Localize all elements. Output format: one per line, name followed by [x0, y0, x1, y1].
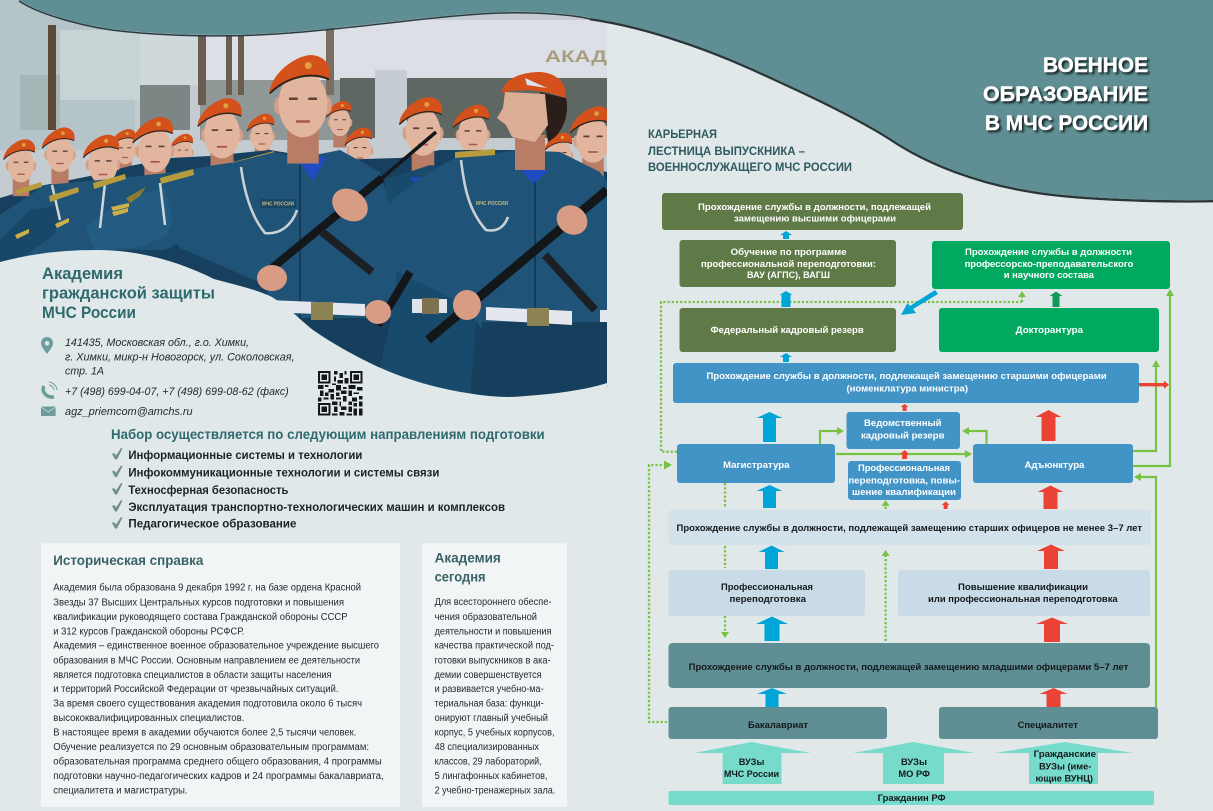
- box: professional retraining: переподготовка, повы-: [848, 475, 960, 486]
- box: senior officers 3-7 years: Прохождение службы в должности, подлежащей замещению старших офицеров не менее 3–7 лет: [676, 523, 1142, 534]
- box: bachelor's: [668, 707, 887, 739]
- panel text: Звезды 37 Высших Центральных курсов подготовки и повышения: [53, 597, 344, 608]
- panel text: В настоящее время в академии обучаются более 2,5 тысячи человек.: [53, 727, 356, 738]
- panel text: специалитета и магистратуры.: [53, 785, 187, 796]
- contact: email: agz_priemcom@amchs.ru: [65, 406, 193, 418]
- box: departmental reserve: Ведомственный: [864, 418, 942, 429]
- contact: phone: [43, 382, 289, 398]
- box: federal reserve: [680, 308, 896, 352]
- arrow: EMERCOM universities: МЧС России: [724, 769, 779, 780]
- box: retraining programme: [680, 240, 896, 287]
- box: retraining programme: Обучение по программе: [731, 247, 847, 258]
- icon: map pin: [41, 337, 53, 354]
- arrow: civil universities: ющие ВУНЦ): [1036, 773, 1093, 784]
- box: retraining programme: профессиональной переподготовки:: [701, 259, 876, 270]
- panel text: образования в МЧС России. Основным направлением ее деятельности: [53, 655, 360, 666]
- arrow: civil universities: [994, 742, 1133, 784]
- panel text: качества практической под-: [435, 641, 554, 652]
- box: doctoral studies: Докторантура: [1016, 325, 1084, 336]
- building background: [0, 0, 607, 200]
- panel: historical background: [41, 543, 400, 807]
- building background: АКАД: [545, 47, 607, 66]
- panel text: и развивается учебно-ма-: [435, 684, 544, 695]
- panel heading: сегодня: [435, 569, 486, 585]
- panel text: онируют главный учебный: [435, 713, 548, 724]
- icon: envelope: [41, 406, 56, 416]
- panel text: За время своего существования академия подготовила около 6 тысяч: [53, 698, 362, 709]
- contact: address: [41, 337, 294, 378]
- career ladder flowchart: [649, 193, 1174, 805]
- box: postgraduate: [973, 444, 1133, 483]
- box: specialist degree: [939, 707, 1158, 739]
- arrow: EMERCOM universities: [694, 742, 811, 784]
- cadet B head: [497, 72, 567, 170]
- box: departmental reserve: кадровый резерв: [861, 431, 945, 442]
- box: bachelor's: Бакалавриат: [748, 720, 808, 731]
- panel text: квалификации руководящего состава Гражданской обороны СССР: [53, 612, 348, 623]
- panel text: териальная база: функци-: [435, 698, 544, 709]
- box: teaching and research staff: Прохождение службы в должности: [965, 247, 1132, 258]
- cadet A head: [270, 55, 332, 164]
- QR code: [318, 371, 362, 416]
- main title: ОБРАЗОВАНИЕ: [983, 82, 1148, 106]
- panel text: Для всестороннего обеспе-: [435, 597, 551, 608]
- panel text: высококвалифицированных специалистов.: [53, 713, 244, 724]
- main title: ВОЕННОЕ: [1043, 53, 1148, 77]
- dark green arrow: [1050, 292, 1062, 307]
- directions list: Инфокоммуникационные технологии и системы связи: [128, 467, 439, 480]
- box: retraining light: [668, 570, 865, 616]
- panel text: образовательная программа среднего общего образования, 4 программы: [53, 756, 382, 767]
- box: departmental reserve: [846, 412, 960, 449]
- check marks: [112, 448, 122, 528]
- cadet B uniform: МЧС РОССИИ: [476, 201, 508, 207]
- box: professional retraining: Профессиональная: [858, 463, 950, 474]
- contact: address: г. Химки, микр-н Новогорск, ул. Соколовская,: [65, 352, 294, 364]
- panel text: 48 специализированных: [435, 742, 539, 753]
- box: junior officers 5-7 years: [668, 643, 1150, 688]
- panel heading: Историческая справка: [53, 552, 204, 568]
- box: senior officers service: Прохождение службы в должности, подлежащей: [698, 202, 931, 213]
- academy title: [42, 265, 215, 322]
- directions list: Техносферная безопасность: [128, 484, 288, 497]
- contact: address: 141435, Московская обл., г.о. Химки,: [65, 337, 249, 349]
- main title: [983, 53, 1148, 135]
- box: teaching and research staff: и научного состава: [1004, 270, 1095, 281]
- box: professional retraining: [848, 461, 961, 500]
- belts: [268, 298, 607, 326]
- photo: marching cadets: [0, 0, 613, 400]
- contact: phone: +7 (498) 699-04-07, +7 (498) 699-08-62 (факс): [65, 386, 289, 398]
- panel: academy today: [422, 543, 567, 807]
- box: junior officers 5-7 years: Прохождение службы в должности, подлежащей замещению младшими офицерами 5–7 лет: [689, 662, 1129, 673]
- box: retraining programme: ВАУ (АГПС), ВАГШ: [747, 270, 830, 281]
- box: minister nomenclature: (номенклатура министра): [846, 384, 968, 395]
- cadet A uniform: [168, 150, 400, 400]
- arrow: EMERCOM universities: ВУЗы: [739, 757, 764, 768]
- rear rank bodies: [0, 150, 607, 400]
- box: senior officers service: [662, 193, 963, 230]
- left rank heads: [4, 97, 613, 200]
- academy title: гражданской защиты: [42, 284, 215, 302]
- panel text: и 312 курсов Гражданской обороны РСФСР.: [53, 626, 244, 637]
- box: teaching and research staff: [932, 241, 1170, 289]
- panel text: Академия была образована 9 декабря 1992 г. на базе ордена Красной: [53, 583, 361, 594]
- middle cadet uniform: [370, 165, 490, 400]
- main title: В МЧС РОССИИ: [985, 111, 1148, 135]
- box: teaching and research staff: профессорско-преподавательского: [965, 259, 1134, 270]
- panel text: 2 учебно-тренажерных зала.: [435, 785, 555, 796]
- green connector lines: [649, 289, 1174, 722]
- icon: phone: [43, 382, 57, 397]
- bottom light wave over the photo: [0, 250, 607, 811]
- panel text: подготовки научно-педагогических кадров и 24 программы бакалавриата,: [53, 771, 384, 782]
- academy title: Академия: [42, 265, 123, 283]
- rear rank heads: [111, 101, 573, 182]
- cadet B uniform: [365, 149, 607, 400]
- box: minister nomenclature: [673, 363, 1139, 403]
- panel text: [53, 583, 384, 796]
- box: master's: [677, 444, 835, 483]
- panel text: [435, 597, 555, 796]
- bar: citizen: [668, 791, 1154, 805]
- box: qualification upgrade: или профессиональная переподготовка: [928, 594, 1118, 605]
- panel text: демии совершенствуется: [435, 670, 542, 681]
- panel text: деятельности и повышения: [435, 626, 551, 637]
- arrow: civil universities: Гражданские: [1034, 749, 1096, 760]
- directions list: Информационные системы и технологии: [128, 449, 362, 462]
- box: senior officers 3-7 years: [668, 510, 1151, 545]
- career ladder heading: КАРЬЕРНАЯ: [648, 127, 717, 141]
- panel text: чения образовательной: [435, 612, 537, 623]
- panel text: и территорий Российской Федерации от чрезвычайных ситуаций.: [53, 684, 339, 695]
- arrow: MoD universities: [853, 742, 974, 784]
- arrow: MoD universities: МО РФ: [898, 769, 930, 780]
- panel text: готовки выпускников в ака-: [435, 655, 551, 666]
- box: senior officers service: замещению высшими офицерами: [734, 214, 896, 225]
- career ladder heading: ЛЕСТНИЦА ВЫПУСКНИКА –: [648, 144, 805, 158]
- hands: [257, 182, 593, 324]
- blue career arrows: [756, 231, 938, 707]
- box: specialist degree: Специалитет: [1018, 720, 1078, 731]
- box: retraining light: Профессиональная: [721, 582, 813, 593]
- cadet A uniform: МЧС РОССИИ: [262, 202, 294, 208]
- arrow: MoD universities: ВУЗы: [901, 757, 927, 768]
- career ladder heading: ВОЕННОСЛУЖАЩЕГО МЧС РОССИИ: [648, 160, 852, 174]
- directions heading: Набор осуществляется по следующим направлениям подготовки: [111, 427, 545, 442]
- panel text: Академия – единственное военное образовательное учреждение высшего: [53, 641, 379, 652]
- box: federal reserve: Федеральный кадровый резерв: [710, 325, 864, 336]
- box: minister nomenclature: Прохождение службы в должности, подлежащей замещению старшими офицерами: [706, 371, 1107, 382]
- directions list: Эксплуатация транспортно-технологических машин и комплексов: [128, 501, 505, 514]
- box: postgraduate: Адъюнктура: [1024, 460, 1085, 471]
- box: qualification upgrade: Повышение квалификации: [958, 582, 1088, 593]
- panel text: Обучение реализуется по 29 основным образовательным программам:: [53, 742, 369, 753]
- box: professional retraining: шение квалификации: [852, 487, 956, 498]
- panel heading: Академия: [435, 550, 501, 566]
- rifles: [272, 132, 607, 340]
- panel text: 5 лингафонных кабинетов,: [435, 771, 548, 782]
- box: qualification upgrade: [898, 570, 1150, 616]
- left rank uniforms: [0, 151, 425, 262]
- academy title: МЧС России: [42, 304, 136, 322]
- directions list: Педагогическое образование: [128, 518, 297, 531]
- directions list: [112, 448, 505, 531]
- box: master's: Магистратура: [723, 460, 790, 471]
- panel text: является подготовка специалистов в области защиты населения: [53, 670, 332, 681]
- panel text: классов, 29 лабораторий,: [435, 756, 542, 767]
- panel text: корпус, 5 учебных корпусов,: [435, 727, 554, 738]
- arrow: civil universities: ВУЗы (име-: [1039, 761, 1091, 772]
- box: doctoral studies: [939, 308, 1159, 352]
- panel heading: [435, 550, 501, 585]
- career ladder heading: [648, 127, 852, 174]
- box: retraining light: переподготовка: [730, 594, 807, 605]
- red career arrows: [900, 381, 1169, 707]
- contact: address: стр. 1А: [65, 366, 104, 378]
- bar: citizen: Гражданин РФ: [878, 793, 946, 804]
